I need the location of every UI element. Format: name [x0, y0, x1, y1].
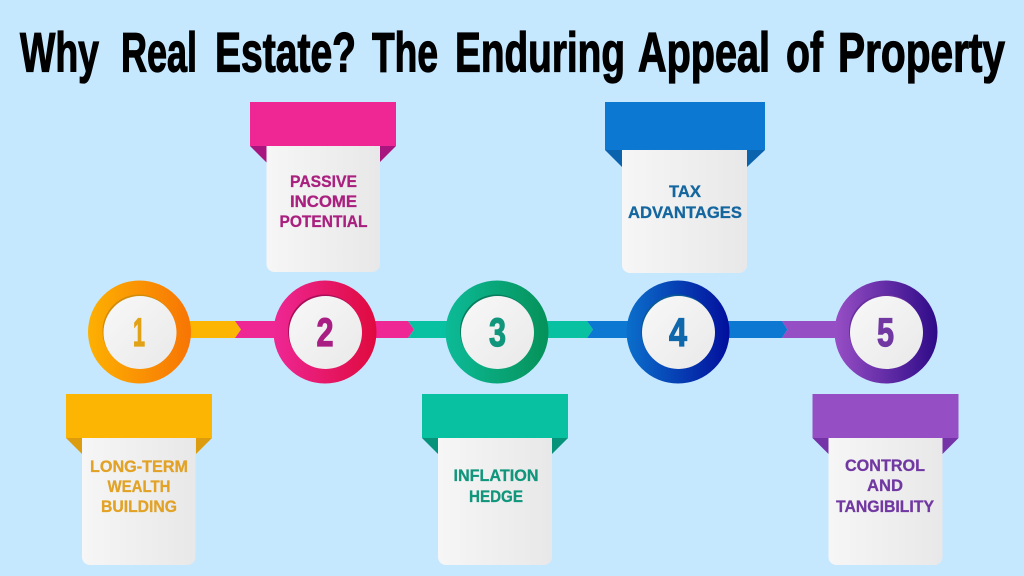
header band	[66, 394, 212, 438]
panel: inflation hedge	[422, 394, 568, 565]
label: ADVANTAGES	[628, 203, 742, 222]
label	[628, 182, 742, 222]
step 2 circle	[274, 280, 376, 384]
label: WEALTH	[108, 477, 170, 496]
label: INCOME	[290, 192, 357, 211]
panel: control and tangibility	[812, 394, 958, 565]
card body	[438, 438, 552, 565]
number 5: 5	[877, 311, 894, 355]
title: The	[372, 20, 438, 84]
card body	[82, 438, 196, 565]
step 3 circle	[446, 280, 548, 384]
label: BUILDING	[101, 497, 177, 516]
panel: long-term wealth building	[66, 394, 212, 565]
connector segment: teal into step 3	[408, 321, 452, 338]
title	[20, 20, 1005, 84]
title: Why	[20, 20, 99, 84]
header band	[422, 394, 568, 438]
connector segment: teal out of step 3	[542, 321, 593, 338]
timeline connector	[186, 321, 840, 338]
label: LONG-TERM	[90, 457, 188, 476]
number 3: 3	[489, 311, 506, 355]
connector segment: purple into step 5	[782, 321, 840, 338]
title: Real	[121, 20, 197, 84]
number 1: 1	[133, 311, 145, 355]
label: CONTROL	[845, 456, 925, 475]
connector segment: yellow	[186, 321, 241, 338]
label	[280, 172, 368, 231]
label: PASSIVE	[290, 172, 357, 191]
label	[454, 466, 538, 506]
header band	[605, 102, 765, 150]
card body	[622, 150, 747, 273]
label: TAX	[669, 182, 702, 201]
title: of	[786, 20, 823, 84]
step 4 circle	[626, 280, 730, 384]
step 5 circle	[834, 280, 938, 384]
label: TANGIBILITY	[836, 497, 935, 516]
header band	[812, 394, 958, 438]
label	[836, 456, 935, 516]
connector segment: blue into step 4	[587, 321, 634, 338]
connector segment: pink out of step 2	[370, 321, 414, 338]
title: Appeal	[638, 20, 770, 84]
number 4: 4	[669, 311, 688, 355]
label	[90, 457, 188, 516]
card body	[266, 146, 380, 272]
panel: tax advantages	[605, 102, 765, 273]
label: HEDGE	[469, 487, 523, 506]
title: Estate?	[215, 20, 356, 84]
card body	[828, 438, 942, 565]
connector segment: pink into step 2	[235, 321, 280, 338]
label: INFLATION	[454, 466, 538, 485]
step 1 circle	[88, 280, 191, 384]
number 2: 2	[316, 311, 334, 355]
title: Enduring	[455, 20, 625, 84]
panel: passive income potential	[250, 102, 396, 272]
label: AND	[867, 476, 903, 495]
header band	[250, 102, 396, 146]
connector segment: blue out of step 4	[724, 321, 788, 338]
label: POTENTIAL	[280, 212, 368, 231]
